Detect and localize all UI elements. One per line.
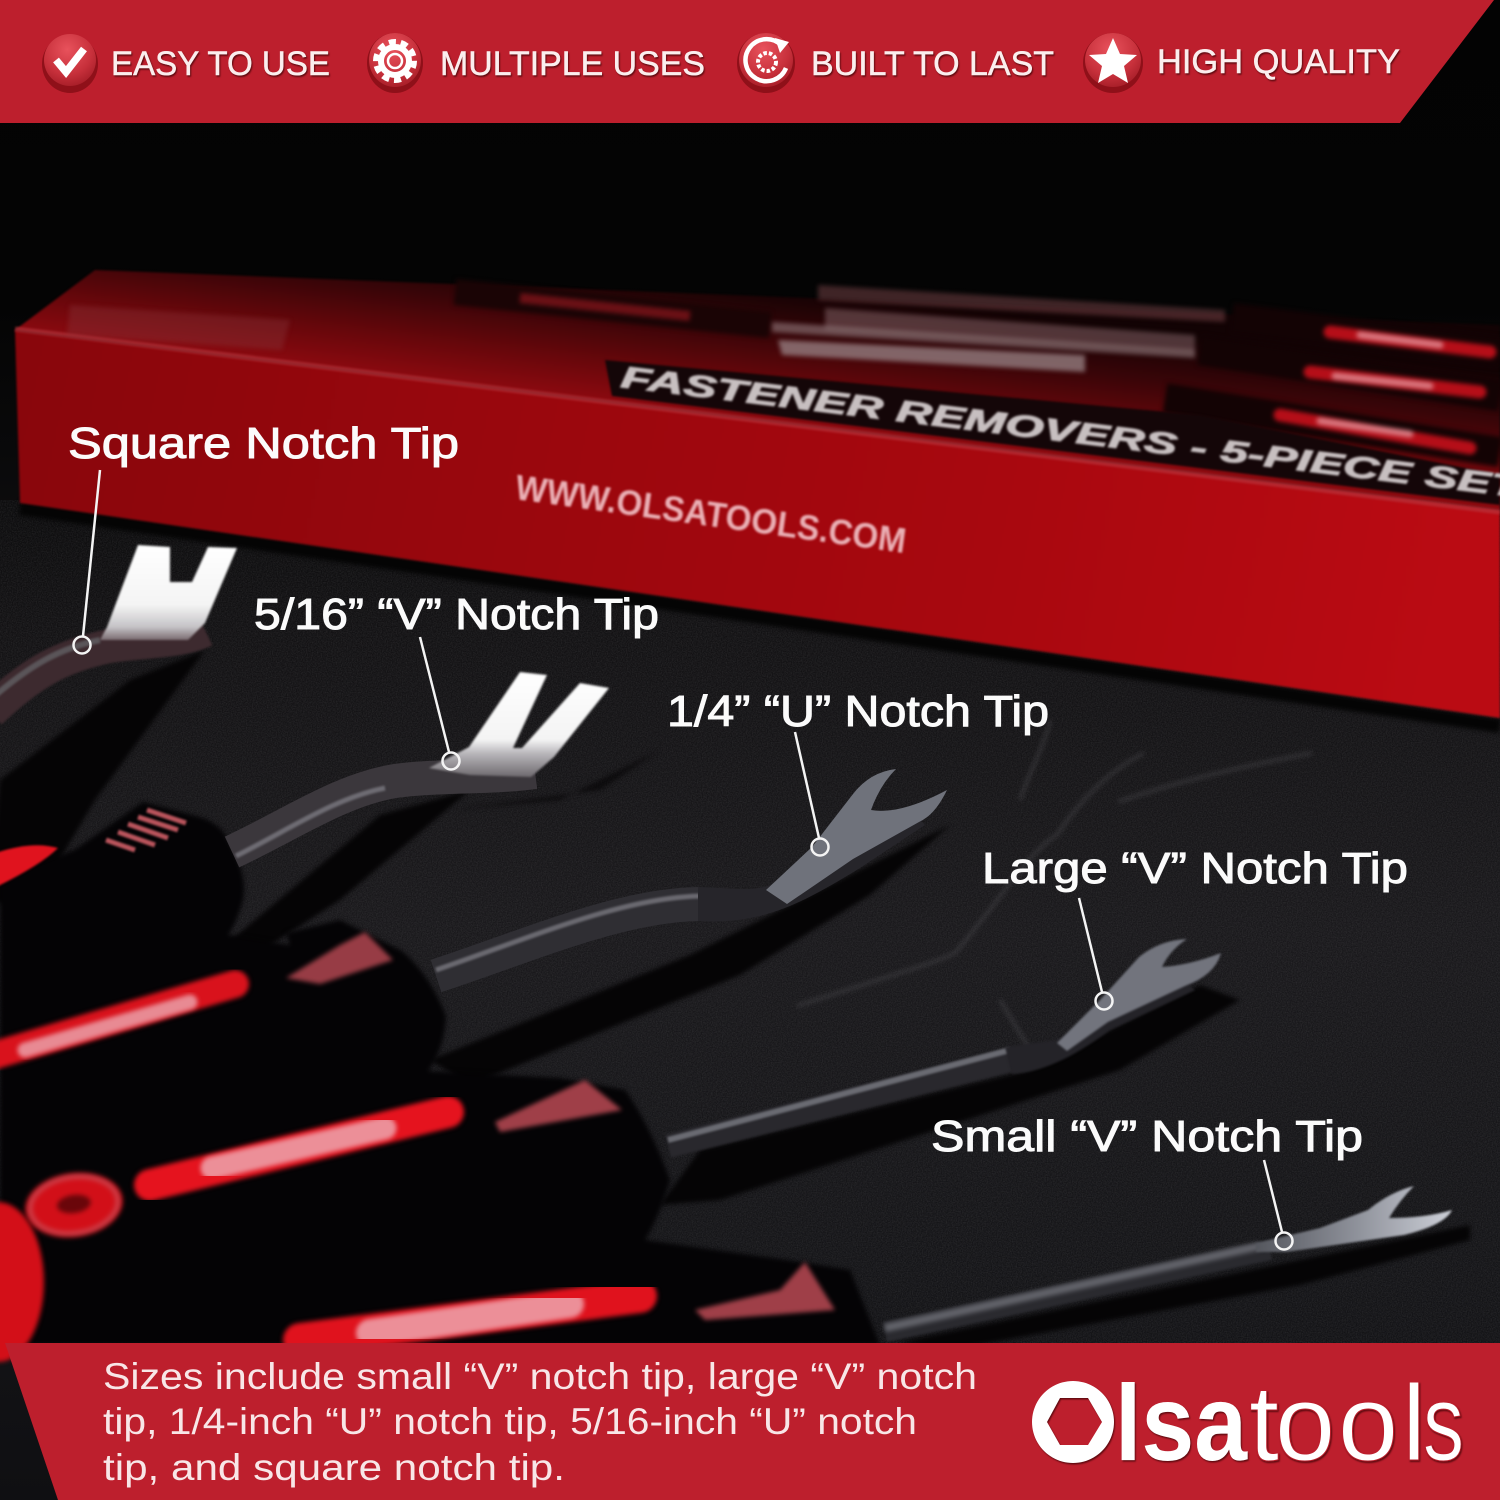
handle 1 red panel — [0, 845, 58, 890]
black handle mass — [0, 802, 880, 1345]
feature: built to last — [737, 33, 1054, 93]
handle 3 red panel — [150, 1112, 448, 1185]
callout: 1/4 U Notch Tip: 1/4” “U” Notch Tip — [667, 687, 1049, 736]
icon: check mark — [42, 34, 98, 93]
logo: Olsatools — [1032, 1362, 1464, 1483]
feature: built to last: BUILT TO LAST — [811, 45, 1054, 83]
handle 3 grip ribs — [495, 1080, 622, 1132]
description text: tip, and square notch tip. — [103, 1447, 565, 1488]
callout: Square Notch Tip: Square Notch Tip — [68, 419, 459, 468]
callout: 5/16 V Notch Tip — [254, 590, 659, 770]
top banner — [0, 0, 1494, 123]
feature: easy to use: EASY TO USE — [111, 45, 330, 83]
description text: tip, 1/4-inch “U” notch tip, 5/16-inch “U” notch — [103, 1401, 917, 1442]
handle 3 butt end — [0, 1202, 44, 1362]
tool 1: square notch tip — [0, 545, 237, 712]
logo: Olsatools: s — [1423, 1362, 1464, 1483]
logo: Olsatools: lsa — [1115, 1362, 1248, 1483]
red product box — [15, 270, 1500, 726]
box title band — [605, 360, 1500, 505]
tool 1 shaft — [0, 630, 205, 712]
tool 4 shaft — [668, 1060, 1010, 1146]
handle 4 grip ribs — [695, 1262, 835, 1320]
feature: high quality — [1083, 33, 1400, 93]
tool 1 blade — [100, 545, 237, 640]
tool 4 fork underside — [1005, 982, 1195, 1074]
tool 5 fork — [1256, 1186, 1452, 1252]
feature: easy to use — [42, 34, 330, 93]
tool 4: large V notch tip — [668, 939, 1221, 1146]
box edge highlight — [15, 329, 1500, 512]
feature: multiple uses — [367, 33, 705, 93]
handle 4 red panel — [300, 1296, 640, 1340]
description text — [103, 1356, 977, 1488]
tool 3 fork underside — [698, 815, 925, 922]
box shadow — [20, 508, 1500, 726]
screwdriver handles — [0, 802, 880, 1362]
box text: product title: FASTENER REMOVERS - 5-PIECE SET — [619, 359, 1500, 505]
tool 3 shaft — [436, 904, 700, 976]
handle 1 grip ribs — [106, 810, 186, 850]
tool 4 fork — [1057, 939, 1221, 1051]
handle 2 red panel — [0, 984, 235, 1056]
callout: Small V Notch Tip — [931, 1112, 1363, 1250]
logo: Olsatools: tool — [1249, 1362, 1426, 1483]
bottom banner — [5, 1343, 1500, 1500]
icon: star — [1083, 33, 1143, 93]
feature: multiple uses: MULTIPLE USES — [440, 45, 705, 83]
tool 2 shaft — [232, 772, 535, 852]
tool 2 blade — [429, 672, 609, 777]
shadows under tools — [0, 650, 1470, 1350]
tool 3 fork — [766, 769, 947, 904]
tool 5: small V notch tip — [885, 1186, 1452, 1332]
handle 3 hanging hole — [21, 1166, 127, 1244]
box front face — [15, 330, 1500, 718]
callout: Large V Notch Tip — [982, 844, 1408, 1010]
box top face — [15, 270, 1500, 510]
tool 3: 1/4 U notch tip — [436, 769, 947, 976]
tool 2: 5/16 notch tip — [232, 672, 609, 856]
icon: refresh gear — [737, 33, 795, 93]
description text: Sizes include small “V” notch tip, large “V” notch — [103, 1356, 977, 1397]
box artwork: tools printed on the lid — [67, 285, 1500, 452]
callout: Square Notch Tip — [68, 419, 459, 654]
icon: gear — [367, 33, 423, 93]
box text: website: WWW.OLSATOOLS.COM — [513, 468, 909, 561]
callout: 1/4 U Notch Tip — [667, 687, 1049, 856]
tool 5 shaft — [885, 1250, 1270, 1332]
callout: 5/16 V Notch Tip: 5/16” “V” Notch Tip — [254, 590, 659, 639]
handle 2 grip ribs — [286, 932, 393, 984]
feature: high quality: HIGH QUALITY — [1157, 43, 1400, 81]
callout: Large V Notch Tip: Large “V” Notch Tip — [982, 844, 1408, 893]
callout: Small V Notch Tip: Small “V” Notch Tip — [931, 1112, 1363, 1161]
